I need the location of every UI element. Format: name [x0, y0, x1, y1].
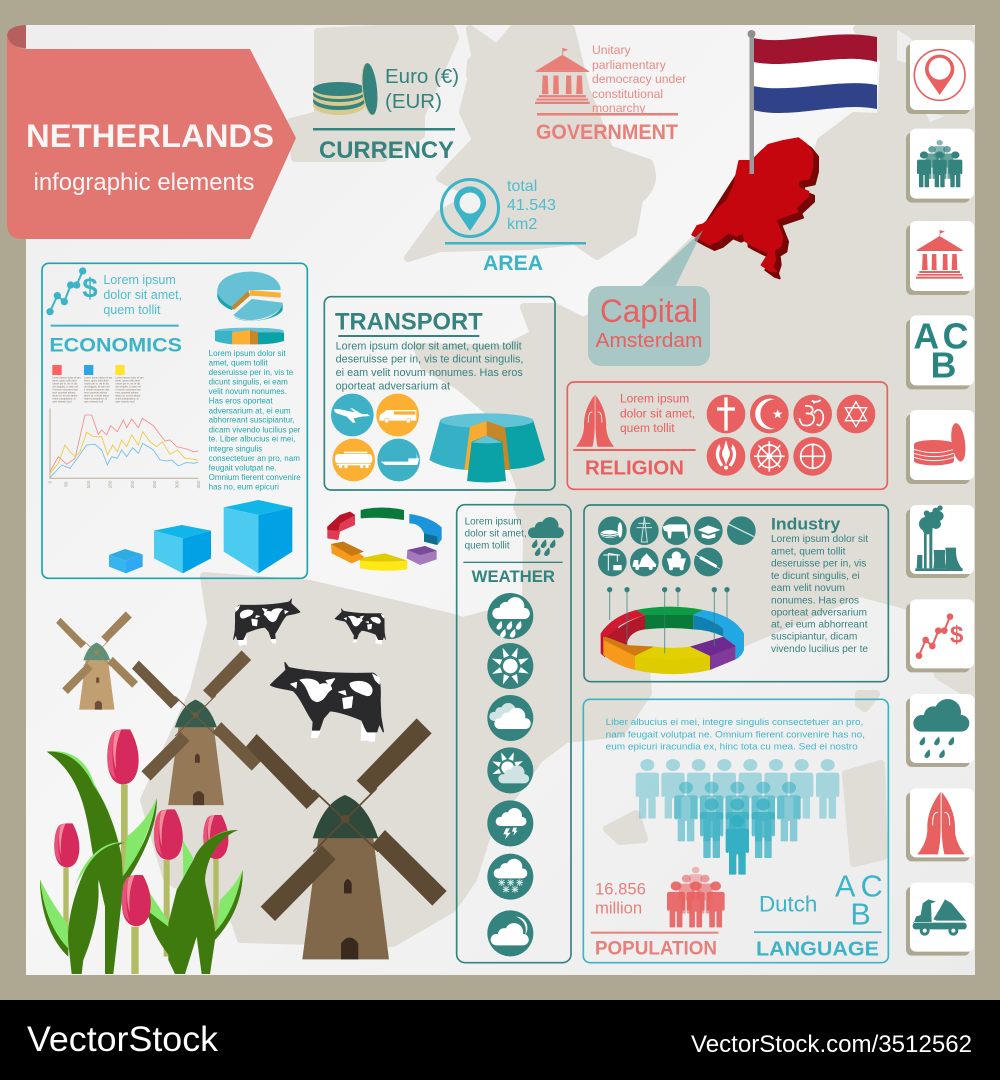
line chart: 150	[108, 480, 113, 488]
economics body text: Lorem ipsum dolor sit	[209, 349, 286, 358]
icon: cow	[662, 516, 691, 545]
transport text: oporteat adversarium at	[336, 380, 450, 392]
icon: crescent and star	[750, 395, 789, 433]
button: language	[906, 315, 974, 389]
button: currency	[906, 410, 974, 484]
chart legend: ruisse per in, vis te dic	[115, 382, 141, 385]
industry text: vivendo lucilius per te	[771, 644, 868, 655]
chart legend: cam vivendo lucil	[52, 400, 72, 403]
transport heading: TRANSPORT	[335, 308, 483, 335]
icon: tank wagon	[332, 439, 375, 481]
chart legend: ruisse per in, vis te dic	[84, 382, 110, 385]
map of the Netherlands	[692, 138, 818, 278]
icon: rain	[487, 593, 533, 639]
tulips	[40, 729, 243, 974]
chart legend: unt singulis, ei eam vel	[52, 385, 78, 388]
chart legend: arium at, ei eum abhor	[84, 394, 109, 397]
government text: monarchy	[592, 101, 646, 115]
button: religion	[906, 788, 974, 861]
cube bars	[109, 500, 292, 573]
religion text: dolor sit amet,	[620, 406, 695, 420]
currency heading: CURRENCY	[319, 137, 454, 164]
chart legend: unt singulis, ei eam vel	[115, 385, 141, 388]
economics body text: Omnium fierent convenire	[209, 473, 301, 482]
language letters: A	[835, 870, 856, 904]
cow right	[335, 609, 386, 644]
economics intro text: dolor sit amet,	[103, 288, 182, 302]
line chart	[48, 408, 201, 488]
government text: Unitary	[592, 43, 632, 57]
icon: area pin	[442, 180, 498, 236]
footer url: VectorStock.com/3512562	[691, 1031, 972, 1058]
area value: km2	[507, 216, 537, 233]
chart legend: reant suscipiantur, di	[115, 397, 139, 400]
icon: syringe	[694, 548, 723, 576]
button: industry	[906, 505, 974, 578]
cow large	[271, 663, 383, 742]
government block	[535, 43, 686, 144]
icon: Khanda	[707, 437, 745, 476]
pie chart	[217, 272, 283, 321]
panel: economics	[42, 263, 307, 578]
industry text: eam velit novum	[771, 583, 845, 594]
icon: mine cart	[662, 548, 691, 576]
government text: parliamentary	[592, 58, 667, 72]
icon: dharma wheel	[750, 437, 789, 476]
panel: industry	[584, 505, 888, 682]
icon: bus	[376, 394, 419, 436]
population text: nam feugait volutpat ne. Omnium fierent convenire has no,	[606, 729, 865, 739]
economics intro text: Lorem ipsum	[103, 273, 176, 287]
icon: coins	[598, 516, 627, 545]
chart legend: ruisse per in, vis te dic	[52, 382, 78, 385]
capital city: Amsterdam	[596, 330, 702, 352]
icon: sun	[487, 643, 533, 689]
icon: growth chart	[46, 267, 98, 315]
chart legend: Lorem ipsum dolor sit am	[52, 376, 81, 379]
currency block	[313, 62, 459, 164]
language letters: B	[850, 897, 871, 931]
icon: circle cross	[793, 437, 832, 476]
transport chart	[429, 413, 545, 482]
economics body text: te. Liber albucius ei mei,	[209, 435, 295, 444]
government text: democracy under	[592, 72, 686, 86]
transport text: ei eam velit novum nonumes. Has eros	[336, 367, 523, 379]
ring chart with pins	[601, 587, 744, 674]
subtitle: infographic elements	[34, 169, 254, 196]
population heading: POPULATION	[595, 938, 717, 959]
population text: Liber albucius ei mei, integre singulis consectetuer an pro,	[606, 717, 863, 727]
transport text: Lorem ipsum dolor sit amet, quem tollit	[336, 340, 522, 352]
button: truck	[906, 883, 974, 956]
chart legend: cam vivendo lucil	[84, 400, 104, 403]
industry text: nonumes. Has eros	[771, 595, 859, 606]
chart legend: Lorem ipsum dolor sit am	[115, 376, 144, 379]
line chart: 250	[152, 480, 157, 488]
flag of the Netherlands	[748, 30, 877, 174]
economics body text: Has eros oporteat	[209, 397, 273, 406]
line chart: 0	[48, 480, 53, 483]
chart legend: amet, quem tollit dese	[52, 379, 78, 382]
economics body text: feugait volutpat ne.	[209, 463, 277, 472]
icon: dump truck	[630, 548, 659, 576]
economics body text: dicam vivendo lucilius per	[209, 425, 301, 434]
icon: thunderstorm	[487, 800, 533, 846]
language heading: LANGUAGE	[756, 938, 879, 960]
icon: graduation cap	[694, 516, 723, 545]
line chart: 50	[64, 481, 69, 487]
panel: population and language	[583, 699, 888, 963]
religion heading: RELIGION	[585, 457, 684, 479]
chart legend: arium at, ei eum abhor	[52, 394, 78, 397]
icon: crane	[598, 548, 627, 576]
windmill medium	[132, 650, 261, 805]
economics body text: integre singulis	[209, 444, 262, 453]
panel: weather	[457, 505, 571, 963]
title banner	[7, 25, 296, 239]
icon: coins	[313, 62, 380, 116]
button: government	[906, 221, 974, 295]
windmill small	[56, 611, 138, 710]
language value: Dutch	[759, 892, 817, 917]
button: language: A	[913, 316, 939, 356]
area block	[442, 178, 586, 275]
capital label: Capital	[600, 293, 698, 329]
capital callout	[588, 230, 710, 366]
chart legend: unt singulis, ei eam vel	[84, 385, 110, 388]
icon: Om symbol	[793, 395, 832, 433]
icon: Christian cross	[707, 395, 745, 433]
segmented ring chart	[327, 507, 442, 571]
icon: population group	[667, 867, 725, 927]
chart legend: it novum nonumes has	[115, 388, 141, 391]
icon: growth chart: $	[82, 273, 98, 304]
icon: partly sunny	[487, 747, 533, 793]
line chart: 300	[174, 480, 179, 488]
economics body text: adversarium at, ei eum	[209, 406, 291, 415]
chart legend	[52, 365, 144, 403]
footer bar	[0, 1000, 1000, 1080]
button: economics: $	[950, 622, 963, 649]
chart legend: arium at, ei eum abhor	[115, 394, 141, 397]
industry text: oporteat adversarium	[771, 607, 867, 618]
windmill large	[246, 718, 447, 959]
button: language: B	[931, 345, 956, 385]
icon: snow	[487, 854, 533, 900]
button: location pin	[906, 40, 974, 114]
icon: government building	[535, 48, 590, 104]
button: weather	[906, 694, 974, 767]
population value: 16.856	[595, 879, 646, 898]
line chart: 350	[196, 480, 201, 488]
economics body text: amet, quem tollit	[209, 358, 268, 367]
language letters: C	[861, 870, 883, 904]
button: language: C	[943, 316, 968, 356]
icon: praying hands	[576, 395, 614, 447]
religion text: Lorem ipsum	[620, 392, 689, 406]
economics body text: velit novum nonumes.	[209, 387, 287, 396]
population text: eum epicuri iracundia ex, hinc tota cu mea. Sed ei nostro	[606, 741, 858, 751]
people pictogram	[636, 759, 839, 875]
weather text: quem tollit	[465, 541, 510, 552]
industry text: te dicunt singulis, ei	[771, 571, 860, 582]
cow left	[234, 599, 300, 645]
panel: religion	[567, 382, 887, 489]
economics heading: ECONOMICS	[49, 335, 182, 357]
button: economics	[906, 599, 974, 672]
economics intro text: quem tollit	[103, 303, 161, 317]
industry text: deseruisse per in, vis	[771, 559, 866, 570]
chart legend: cam vivendo lucil	[115, 400, 135, 403]
icon: Star of David	[837, 395, 875, 433]
line chart: 200	[130, 480, 135, 488]
sidebar icon buttons	[906, 40, 974, 956]
weather text: Lorem ipsum	[465, 517, 522, 528]
footer logo: VectorStock	[27, 1020, 219, 1059]
transport text: deseruisse per in, vis te dicunt singulis,	[336, 354, 523, 366]
chart legend: reant suscipiantur, di	[84, 397, 108, 400]
industry text: suscipiantur, dicam	[771, 632, 857, 643]
icon: ship	[377, 439, 420, 481]
icon: power pylon	[630, 516, 659, 545]
chart legend: Lorem ipsum dolor sit am	[84, 376, 112, 379]
weather heading: WEATHER	[472, 568, 555, 586]
chart legend: eros oporteat advers	[52, 391, 76, 394]
line chart: 100	[86, 480, 91, 488]
currency value: (EUR)	[385, 90, 442, 113]
economics body text: dicunt singulis, ei eam	[209, 378, 288, 387]
windmills, cows and tulips illustration	[40, 599, 447, 974]
chart legend: eros oporteat advers	[84, 391, 108, 394]
icon: needle	[727, 516, 756, 545]
economics body text: has no, eum epicuri	[209, 482, 279, 491]
chart legend: it novum nonumes has	[84, 388, 110, 391]
economics body text: deseruisse per in, vis te	[209, 368, 294, 377]
area value: total	[507, 178, 537, 195]
currency value: Euro (€)	[385, 65, 459, 88]
chart legend: amet, quem tollit dese	[84, 379, 109, 382]
economics body text: abhorreant suscipiantur,	[209, 416, 295, 425]
area heading: AREA	[483, 252, 543, 275]
stacked band chart	[215, 328, 284, 344]
chart legend: amet, quem tollit dese	[115, 379, 141, 382]
title: NETHERLANDS	[26, 118, 274, 154]
industry heading: Industry	[771, 514, 841, 533]
area value: 41.543	[507, 197, 556, 214]
icon: cloudy	[487, 695, 533, 741]
government text: constitutional	[592, 87, 663, 101]
industry text: Lorem ipsum dolor sit	[771, 534, 868, 545]
chart legend: eros oporteat advers	[115, 391, 139, 394]
religion text: quem tollit	[620, 421, 675, 435]
industry text: at, ei eum abhorreant	[771, 620, 868, 631]
economics body text: consectetuer an pro, nam	[209, 454, 300, 463]
button: people	[906, 129, 974, 203]
icon: rain cloud	[528, 517, 564, 556]
icon: cloudy night	[487, 910, 533, 956]
weather text: dolor sit amet,	[465, 529, 527, 540]
chart legend: reant suscipiantur, di	[52, 397, 76, 400]
panel: transport	[324, 297, 555, 490]
industry text: amet, quem tollit	[771, 546, 846, 557]
icon: airplane	[331, 394, 374, 436]
population value: million	[595, 899, 642, 918]
government heading: GOVERNMENT	[536, 121, 678, 144]
chart legend: it novum nonumes has	[52, 388, 78, 391]
